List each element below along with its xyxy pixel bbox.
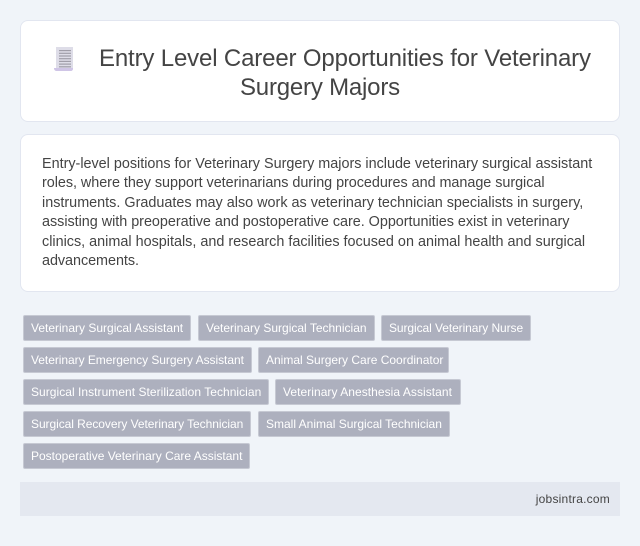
description text: roles, where they support veterinarians during procedures and manage surgical — [42, 175, 544, 191]
tag — [258, 347, 449, 373]
tag — [23, 443, 250, 469]
tag: Veterinary Anesthesia Assistant — [283, 385, 452, 399]
description text: instruments. Graduates may also work as veterinary technician specialists in surgery, — [42, 195, 583, 211]
tag — [198, 315, 375, 341]
tag — [23, 315, 191, 341]
tag: Postoperative Veterinary Care Assistant — [31, 449, 242, 463]
tag: Veterinary Emergency Surgery Assistant — [31, 353, 244, 367]
tag — [23, 411, 251, 437]
footer bar — [20, 482, 620, 516]
tag — [381, 315, 531, 341]
tag: Veterinary Surgical Assistant — [31, 321, 183, 335]
title: Surgery Majors — [240, 74, 400, 101]
tag: Surgical Recovery Veterinary Technician — [31, 417, 243, 431]
description text: Entry-level positions for Veterinary Surgery majors include veterinary surgical assistant — [42, 156, 592, 172]
job title tags — [23, 315, 531, 469]
tag — [23, 347, 252, 373]
title: Entry Level Career Opportunities for Veterinary — [99, 45, 591, 72]
title — [99, 45, 591, 101]
tag: Animal Surgery Care Coordinator — [266, 353, 443, 367]
icon: document scroll — [54, 47, 73, 71]
header panel — [20, 20, 620, 122]
tag: Small Animal Surgical Technician — [266, 417, 442, 431]
tag — [23, 379, 269, 405]
footer source link: jobsintra.com — [536, 492, 610, 506]
tag — [275, 379, 461, 405]
description text: clinics, animal hospitals, and research facilities focused on animal health and surgical — [42, 234, 585, 250]
tag — [258, 411, 450, 437]
tag: Surgical Instrument Sterilization Technician — [31, 385, 261, 399]
description text: assisting with preoperative and postoperative care. Opportunities exist in veterinary — [42, 214, 569, 230]
tag: Surgical Veterinary Nurse — [389, 321, 523, 335]
description panel — [20, 134, 620, 292]
description text — [42, 156, 592, 269]
tag: Veterinary Surgical Technician — [206, 321, 367, 335]
description text: advancements. — [42, 253, 139, 269]
